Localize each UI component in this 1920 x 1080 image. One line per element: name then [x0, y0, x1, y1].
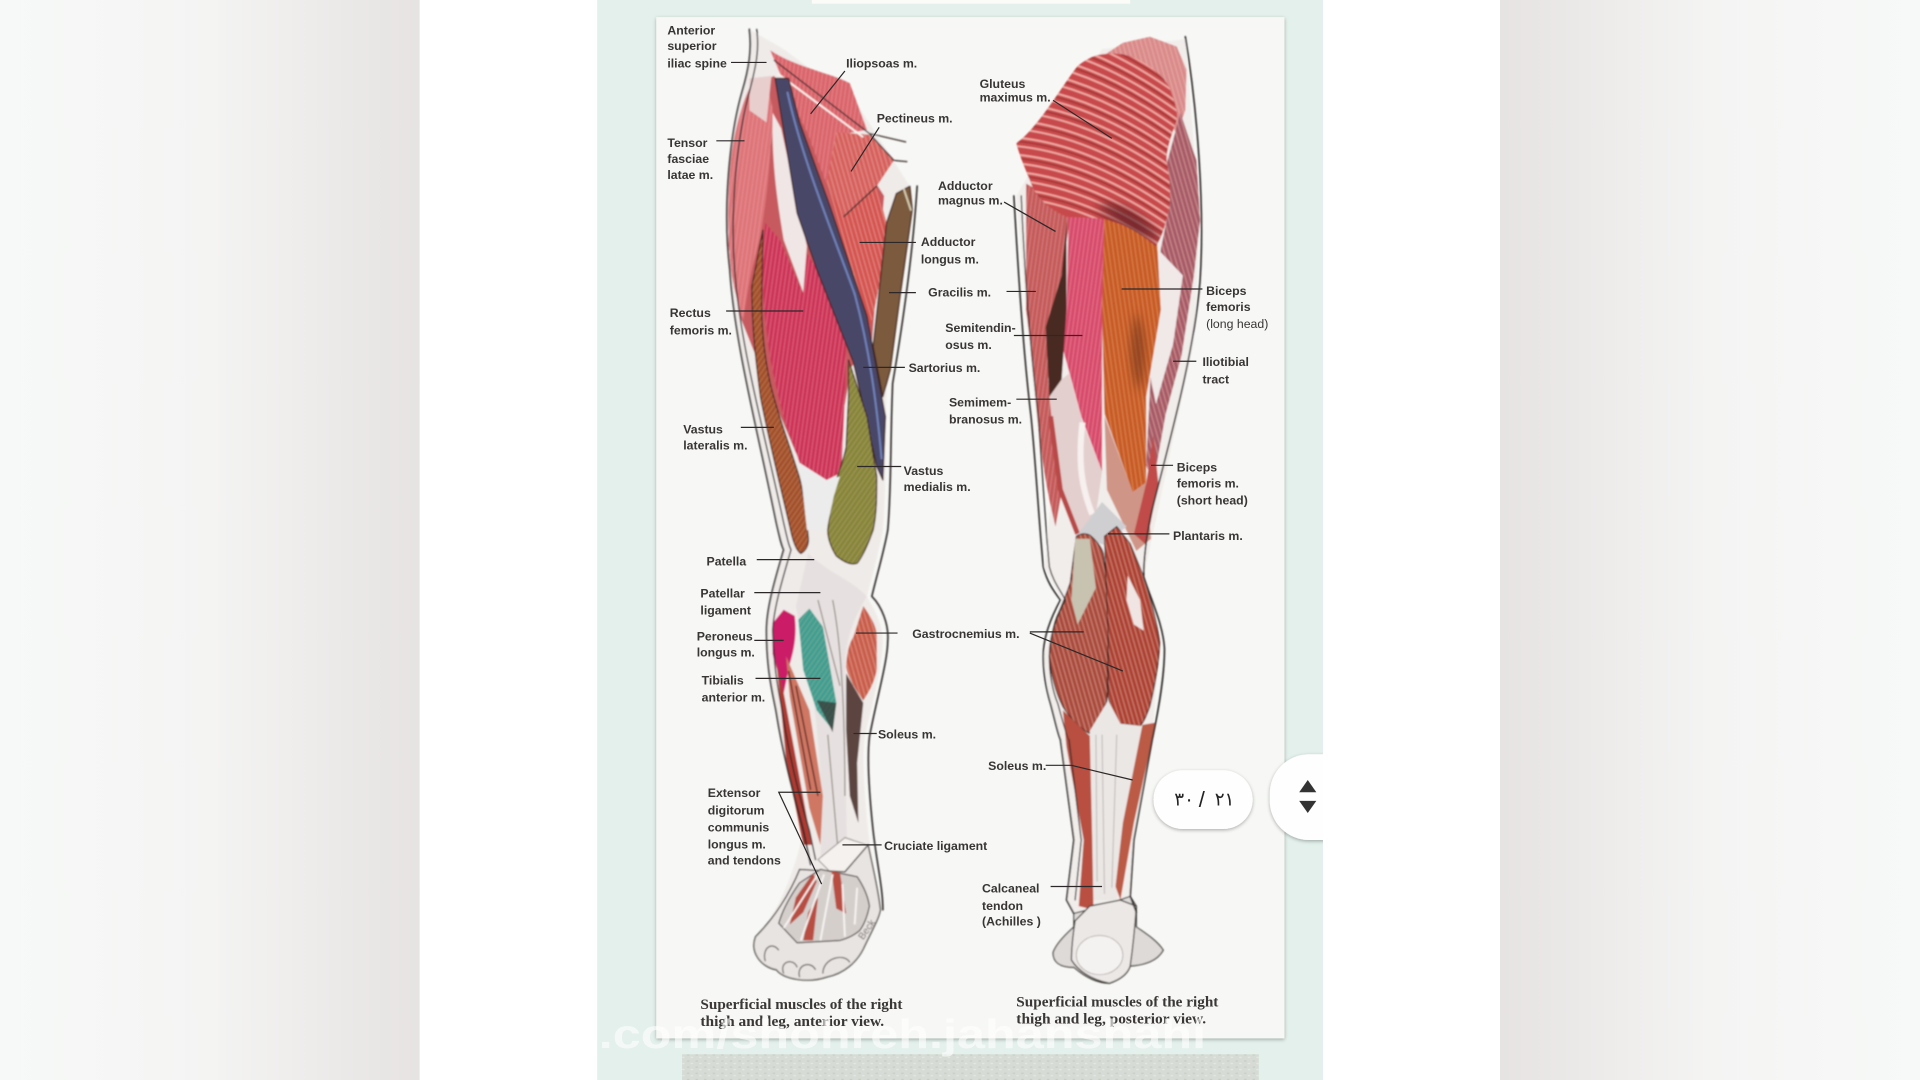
- label: plantaris: [1108, 529, 1243, 543]
- adductor longus: [827, 180, 887, 333]
- semitendinosus: [1062, 202, 1104, 471]
- anatomical labels, anterior view: [667, 23, 991, 884]
- label: gluteus maximus: Gluteus: [980, 77, 1026, 91]
- label: gluteus maximus: [980, 77, 1112, 138]
- label: iliotibial tract: tract: [1202, 372, 1229, 386]
- page counter pill: ۳۰: [1174, 790, 1194, 811]
- watermark: .com/shohreh.jahanshahi: [599, 1011, 1206, 1057]
- iliotibial tract: [1146, 113, 1200, 482]
- label: iliotibial tract: Iliotibial: [1202, 355, 1249, 369]
- vastus medialis: [828, 360, 877, 564]
- gracilis: [873, 186, 912, 397]
- rectus femoris: [763, 223, 846, 480]
- label: patellar ligament: ligament: [700, 604, 751, 618]
- white tendon of rectus: [772, 113, 807, 293]
- label: rectus femoris: [670, 306, 803, 337]
- gastrocnemius anterior: [846, 606, 877, 700]
- label: calcaneal tendon: tendon: [982, 899, 1023, 913]
- caption: posterior view: Superficial muscles of the right: [1016, 995, 1219, 1011]
- label: tensor fasciae latae: Tensor: [667, 136, 708, 150]
- label: vastus medialis: Vastus: [904, 464, 943, 478]
- label: biceps femoris short head: [1151, 460, 1248, 507]
- caption: anterior view: Superficial muscles of the right: [700, 997, 903, 1013]
- illustrator signature: Beck: [857, 918, 878, 942]
- label: tensor fasciae latae: latae m.: [667, 168, 713, 182]
- patellar ligament and shin: [796, 553, 867, 863]
- lower calf red strips: [1063, 710, 1093, 910]
- semimembranosus tendon: [1049, 373, 1102, 539]
- label: extensor digitorum communis longus: Extensor: [708, 786, 761, 800]
- label: rectus femoris: Rectus: [670, 306, 711, 320]
- caption: anterior view: [700, 997, 903, 1030]
- label: soleus anterior: Soleus m.: [878, 727, 936, 741]
- anterior leg illustration: [727, 29, 917, 980]
- label: calcaneal tendon: (Achilles ): [982, 915, 1041, 929]
- label: gastrocnemius: [856, 627, 1123, 671]
- label: tibialis anterior: [702, 673, 820, 705]
- inguinal ligament: [774, 60, 907, 162]
- iliopsoas: [770, 50, 867, 184]
- label: biceps femoris long head: [1122, 284, 1268, 331]
- page counter pill: [1153, 770, 1253, 829]
- label: patellar ligament: [700, 587, 820, 618]
- label: peroneus longus: Peroneus: [697, 629, 753, 643]
- label: gastrocnemius: Gastrocnemius m.: [912, 627, 1020, 641]
- anterior outer contours: [727, 29, 811, 864]
- label: soleus posterior: [988, 759, 1133, 780]
- right blurred background strip: [1500, 0, 1920, 1080]
- left blurred background strip: [0, 0, 420, 1080]
- label: anterior superior iliac spine: superior: [667, 39, 717, 53]
- label: semitendinosus: Semitendin-: [945, 321, 1016, 335]
- label: iliotibial tract: [1173, 355, 1249, 386]
- vastus lateralis: [752, 230, 808, 553]
- label: calcaneal tendon: Calcaneal: [982, 882, 1039, 896]
- posterior silhouette: [1016, 39, 1200, 983]
- bottom noisy strip: [682, 1054, 1259, 1080]
- label: rectus femoris: femoris m.: [670, 323, 732, 337]
- biceps femoris short head: [1134, 435, 1158, 545]
- label: anterior superior iliac spine: [667, 23, 767, 70]
- label: pectineus: Pectineus m.: [877, 111, 953, 125]
- dark semimembranosus shadow: [1046, 220, 1067, 397]
- label: biceps femoris short head: (short head): [1177, 493, 1248, 507]
- heel and ankle: [1053, 896, 1163, 983]
- label: patellar ligament: Patellar: [700, 587, 745, 601]
- label: anterior superior iliac spine: Anterior: [667, 23, 715, 37]
- pectineus: [827, 132, 894, 217]
- label: adductor magnus: [938, 179, 1056, 231]
- posterior outer contours: [1014, 196, 1074, 913]
- label: vastus lateralis: lateralis m.: [683, 438, 748, 452]
- anatomical labels, posterior view: [856, 77, 1268, 929]
- calf tendon: [1090, 700, 1142, 900]
- label: vastus medialis: [857, 464, 971, 494]
- label: extensor digitorum communis longus: [708, 786, 822, 884]
- top white bar: [812, 0, 1130, 4]
- label: sartorius: [863, 361, 980, 375]
- label: extensor digitorum communis longus: and tendons: [708, 853, 781, 867]
- label: gluteus maximus: maximus m.: [980, 91, 1051, 105]
- label: adductor magnus: magnus m.: [938, 193, 1003, 207]
- label: sartorius: Sartorius m.: [909, 361, 980, 375]
- label: peroneus longus: [697, 629, 784, 659]
- quadriceps tendon: [800, 463, 840, 530]
- label: gracilis: [889, 285, 991, 299]
- label: semitendinosus: osus m.: [945, 338, 992, 352]
- leader: gracilis posterior: [1007, 290, 1036, 292]
- label: semitendinosus: [945, 321, 1082, 352]
- popliteal fossa: [1076, 502, 1127, 545]
- label: vastus lateralis: [683, 422, 774, 452]
- scroll button with up and down arrows: [1268, 754, 1323, 844]
- ankle ligament: [818, 838, 867, 874]
- label: gracilis: Gracilis m.: [928, 285, 991, 299]
- label: extensor digitorum communis longus: longus m.: [708, 838, 766, 852]
- label: soleus posterior: Soleus m.: [988, 759, 1046, 773]
- label: tensor fasciae latae: fasciae: [667, 152, 709, 166]
- label: extensor digitorum communis longus: digitorum: [708, 803, 765, 817]
- label: cruciate ligament: Cruciate ligament: [884, 839, 987, 853]
- label: adductor longus: Adductor: [921, 235, 976, 249]
- label: tibialis anterior: Tibialis: [702, 673, 744, 687]
- lower biceps tendons: [1104, 416, 1151, 551]
- foot: [754, 845, 880, 980]
- label: vastus medialis: medialis m.: [904, 480, 971, 494]
- tensor fasciae latae: [728, 83, 773, 321]
- label: adductor longus: longus m.: [921, 252, 979, 266]
- caption: posterior view: thigh and leg, posterior view.: [1016, 1012, 1206, 1028]
- label: biceps femoris long head: femoris: [1206, 300, 1251, 314]
- anterior silhouette: [727, 29, 911, 978]
- label: semimembranosus: [949, 396, 1057, 427]
- label: vastus lateralis: Vastus: [683, 422, 723, 436]
- peroneal red muscles: [786, 656, 823, 845]
- label: extensor digitorum communis longus: communis: [708, 820, 769, 834]
- page counter pill: /: [1199, 787, 1206, 812]
- label: iliopsoas: [811, 56, 917, 114]
- label: biceps femoris long head: Biceps: [1206, 284, 1247, 298]
- soleus anterior: [846, 673, 863, 823]
- label: peroneus longus: longus m.: [697, 645, 755, 659]
- caption: anterior view: thigh and leg, anterior view.: [700, 1014, 884, 1030]
- white band on iliotibial tract: [1149, 251, 1183, 404]
- gluteus medius fibres: [1102, 37, 1187, 135]
- label: calcaneal tendon: [982, 882, 1102, 929]
- upper thigh red underlayer: [729, 76, 884, 453]
- label: adductor magnus: Adductor: [938, 179, 993, 193]
- posterior leg illustration: [1012, 35, 1204, 985]
- caption: posterior view: [1016, 995, 1219, 1028]
- label: tensor fasciae latae: [667, 136, 744, 182]
- paper page: [656, 17, 1284, 1038]
- gastrocnemius right head: [1104, 527, 1160, 726]
- label: pectineus: [851, 111, 953, 171]
- label: tibialis anterior: anterior m.: [702, 691, 765, 705]
- page counter pill: ۲۱: [1215, 790, 1234, 811]
- label: adductor longus: [860, 235, 979, 266]
- label: semimembranosus: branosus m.: [949, 413, 1022, 427]
- label: biceps femoris short head: Biceps: [1177, 460, 1217, 474]
- mint slide panel: [597, 0, 1323, 1080]
- pale fascia near the hip: [749, 76, 771, 122]
- adductor and gracilis: [1026, 184, 1071, 527]
- label: biceps femoris short head: femoris m.: [1177, 476, 1239, 490]
- biceps femoris long head: [1102, 208, 1161, 492]
- gluteus maximus: [1016, 53, 1178, 246]
- peroneus longus: [773, 610, 795, 693]
- sartorius: [775, 78, 885, 480]
- label: biceps femoris long head: (long head): [1206, 317, 1268, 331]
- tibialis anterior: [798, 609, 836, 730]
- gastrocnemius left head: [1049, 534, 1108, 733]
- label: plantaris: Plantaris m.: [1173, 529, 1243, 543]
- label: semimembranosus: Semimem-: [949, 396, 1011, 410]
- label: anterior superior iliac spine: iliac spine: [667, 56, 727, 70]
- label: patella: [707, 555, 814, 569]
- label: patella: Patella: [707, 555, 746, 569]
- label: iliopsoas: Iliopsoas m.: [846, 56, 917, 70]
